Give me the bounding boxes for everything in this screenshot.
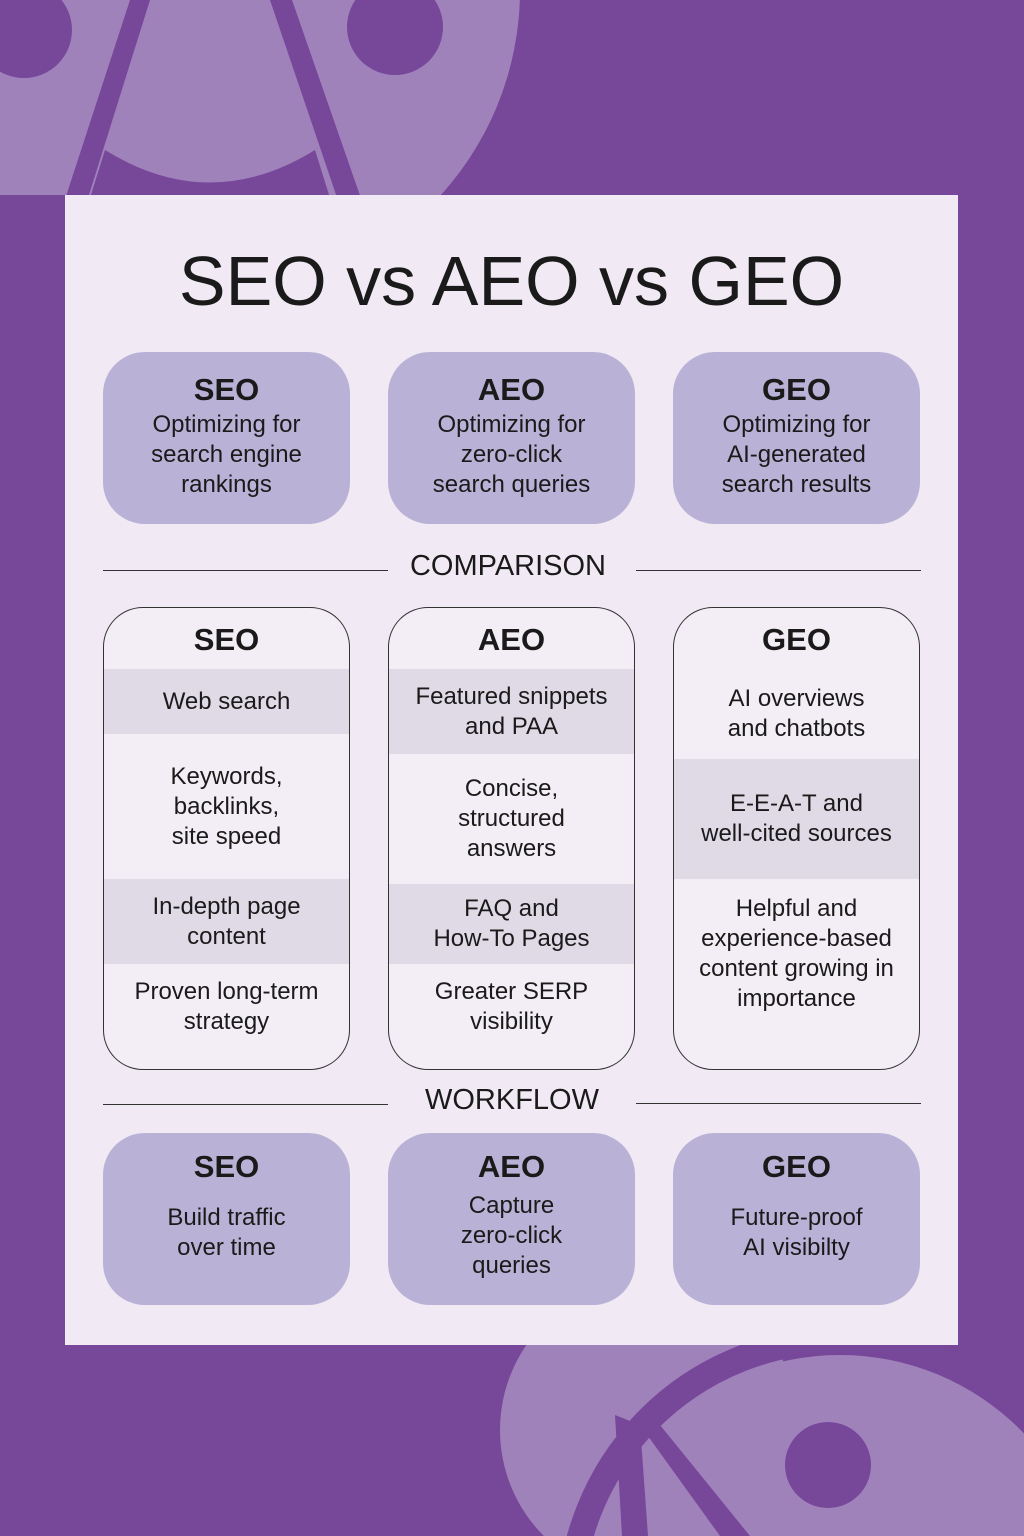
box: AEO workflow: Capture [469,1192,554,1219]
panel: main card [65,195,958,1345]
column: AEO comparison: How-To Pages [433,925,590,952]
box: AEO definition [388,352,635,524]
column: SEO comparison: SEO [194,622,259,657]
column: GEO comparison: well-cited sources [701,820,892,847]
box: GEO definition: GEO [762,372,831,407]
box: GEO workflow [673,1133,920,1305]
column: SEO comparison: site speed [172,822,281,850]
box: AEO workflow [388,1133,635,1305]
column: GEO comparison: experience-based [701,925,892,952]
column: SEO comparison: Proven long-term [134,978,319,1004]
column: GEO comparison: and chatbots [728,715,865,742]
box: SEO definition: SEO [194,372,259,407]
column: SEO comparison: Web search [163,688,290,714]
column: AEO comparison: structured [458,805,565,832]
box: AEO workflow: queries [472,1252,551,1279]
box: SEO workflow [103,1133,350,1305]
column: GEO comparison: E-E-A-T and [730,790,863,817]
column: SEO comparison: Keywords, [170,762,283,790]
column: SEO comparison: backlinks, [174,792,279,820]
column: SEO comparison: In-depth page [152,892,301,920]
box: AEO definition: AEO [478,372,545,407]
column: AEO comparison [388,607,635,1070]
heading: comparison: COMPARISON [410,550,606,582]
title: SEO vs AEO vs GEO [179,242,844,320]
box: AEO definition: search queries [433,471,590,498]
column: GEO comparison: importance [737,985,856,1012]
column: SEO comparison [103,607,350,1070]
box: GEO workflow: GEO [762,1149,831,1184]
column: AEO comparison: Greater SERP [435,978,588,1004]
column: AEO comparison: answers [467,835,556,862]
decoration: top shapes [0,0,520,195]
box: GEO definition: search results [722,471,871,498]
box: GEO definition [673,352,920,524]
column: AEO comparison: Concise, [465,775,558,802]
column: AEO comparison: visibility [470,1008,553,1034]
box: GEO definition: AI-generated [727,441,866,468]
heading: workflow: WORKFLOW [425,1084,599,1116]
box: SEO workflow: SEO [194,1149,259,1184]
column: GEO comparison: AI overviews [728,685,865,712]
box: GEO definition: Optimizing for [722,411,871,438]
column: SEO comparison: content [187,922,266,950]
box: SEO workflow: over time [177,1234,276,1261]
box: SEO definition: rankings [181,471,272,498]
decoration: bottom shapes [500,1345,1024,1536]
column: AEO comparison: AEO [478,622,545,657]
box: AEO definition: zero-click [461,441,562,468]
box: AEO workflow: AEO [478,1149,545,1184]
box: SEO definition [103,352,350,524]
column: GEO comparison: GEO [762,622,831,657]
box: GEO workflow: Future-proof [730,1204,863,1231]
column: GEO comparison: Helpful and [736,895,857,922]
box: SEO workflow: Build traffic [167,1204,286,1231]
box: SEO definition: search engine [151,441,302,468]
box: GEO workflow: AI visibilty [743,1234,850,1261]
column: GEO comparison: content growing in [699,955,894,982]
column: AEO comparison: FAQ and [464,895,559,922]
box: AEO workflow: zero-click [461,1222,562,1249]
column: GEO comparison [673,607,920,1070]
column: AEO comparison: and PAA [465,712,558,740]
column: AEO comparison: Featured snippets [415,682,608,710]
box: SEO definition: Optimizing for [152,411,301,438]
column: SEO comparison: strategy [184,1008,269,1034]
box: AEO definition: Optimizing for [437,411,586,438]
